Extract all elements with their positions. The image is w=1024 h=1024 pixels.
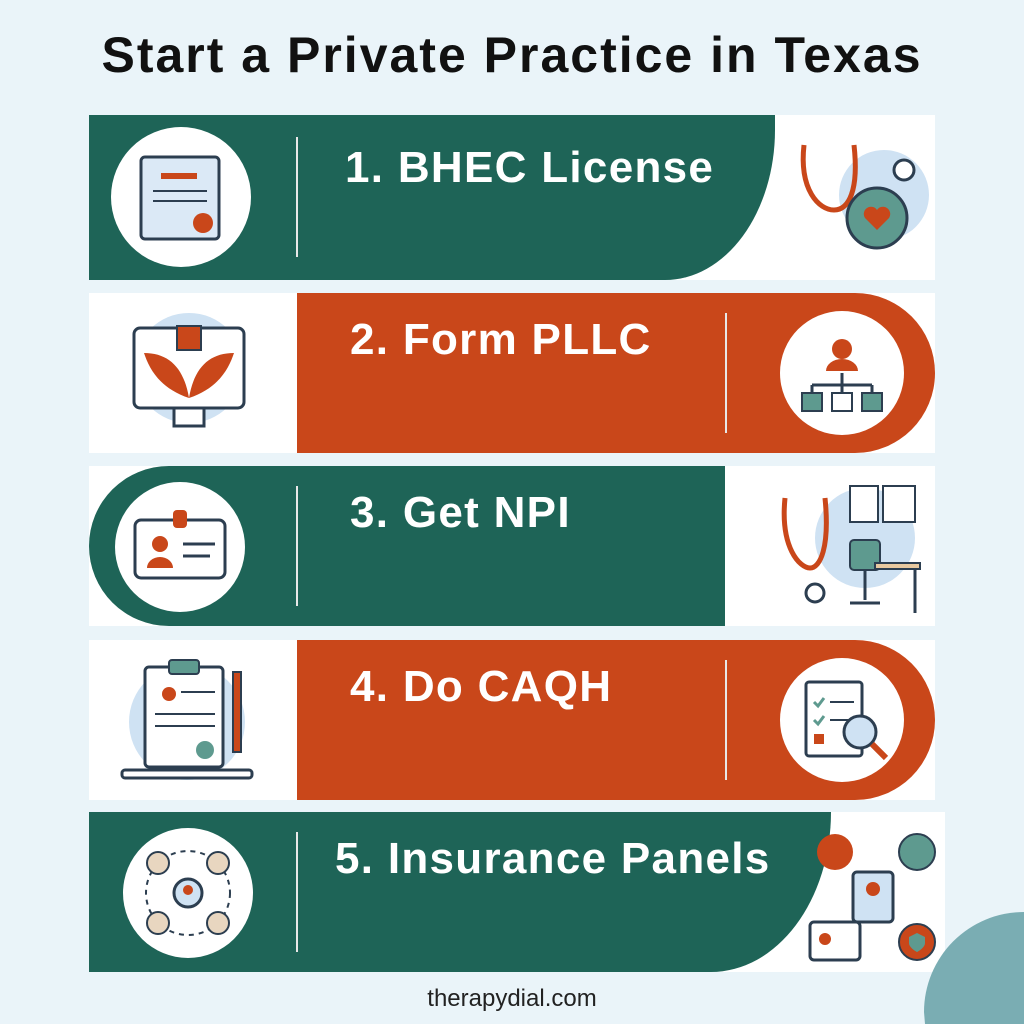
icon: people network — [808, 833, 936, 962]
icon: certificate — [111, 127, 251, 267]
row 2: Form PLLC — [89, 293, 935, 453]
step text: 4. Do CAQH — [350, 662, 612, 711]
footer url: therapydial.com — [427, 985, 597, 1012]
icon: id card — [115, 482, 245, 612]
green band — [89, 115, 775, 280]
icon: stethoscope — [800, 144, 929, 250]
icon: document search — [780, 658, 904, 782]
step text: 1. BHEC License — [345, 143, 714, 192]
icon: network — [123, 828, 253, 958]
step text: 3. Get NPI — [350, 488, 571, 537]
icon: clipboard laptop — [120, 659, 254, 780]
row 3: Get NPI — [89, 466, 935, 626]
icon: office desk — [782, 485, 921, 613]
title: Start a Private Practice in Texas — [101, 27, 923, 83]
row 1: BHEC License — [89, 115, 935, 280]
decorative teal circle — [924, 912, 1024, 1024]
orange band — [297, 293, 935, 453]
row 5: Insurance Panels — [89, 812, 945, 972]
step text: 5. Insurance Panels — [335, 834, 771, 883]
green band — [89, 812, 831, 972]
row 4: Do CAQH — [89, 640, 935, 800]
icon: computer — [132, 313, 246, 428]
step text: 2. Form PLLC — [350, 315, 652, 364]
orange band — [297, 640, 935, 800]
green band — [89, 466, 725, 626]
icon: org chart — [780, 311, 904, 435]
